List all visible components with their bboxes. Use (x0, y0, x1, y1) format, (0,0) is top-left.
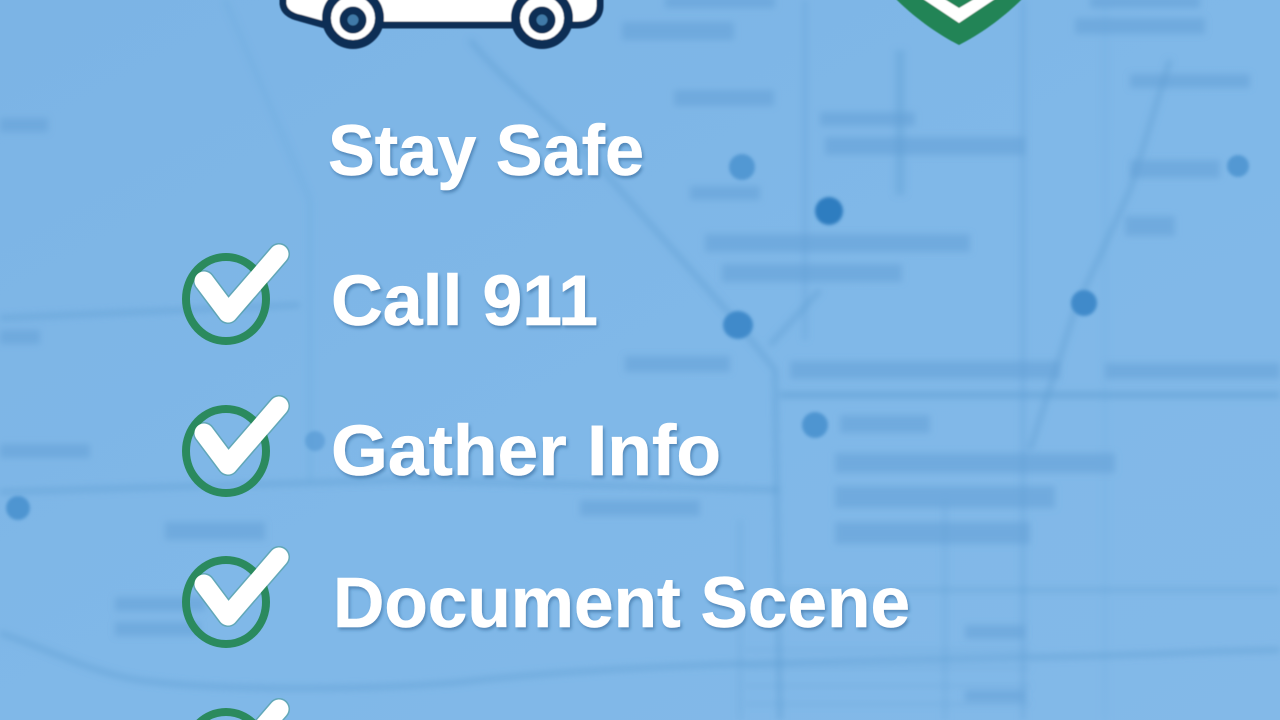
left wheel (326, 0, 380, 44)
map pins (6, 154, 1249, 520)
right wheel (516, 0, 568, 44)
icon: shield (892, 0, 1026, 45)
item: cropped check mark (186, 709, 279, 720)
icon: check mark (186, 557, 279, 644)
item: Document Scene (186, 557, 910, 644)
icon: check mark (186, 406, 279, 493)
heading: Stay Safe: Stay Safe (328, 112, 644, 191)
label: Call 911 (331, 262, 598, 341)
icon: check mark (186, 254, 279, 341)
item: Call 911 (186, 254, 598, 341)
item: Gather Info (186, 406, 721, 493)
icon: car (283, 0, 600, 44)
label: Gather Info (331, 412, 721, 491)
checklist (186, 254, 910, 720)
label: Document Scene (333, 564, 910, 643)
